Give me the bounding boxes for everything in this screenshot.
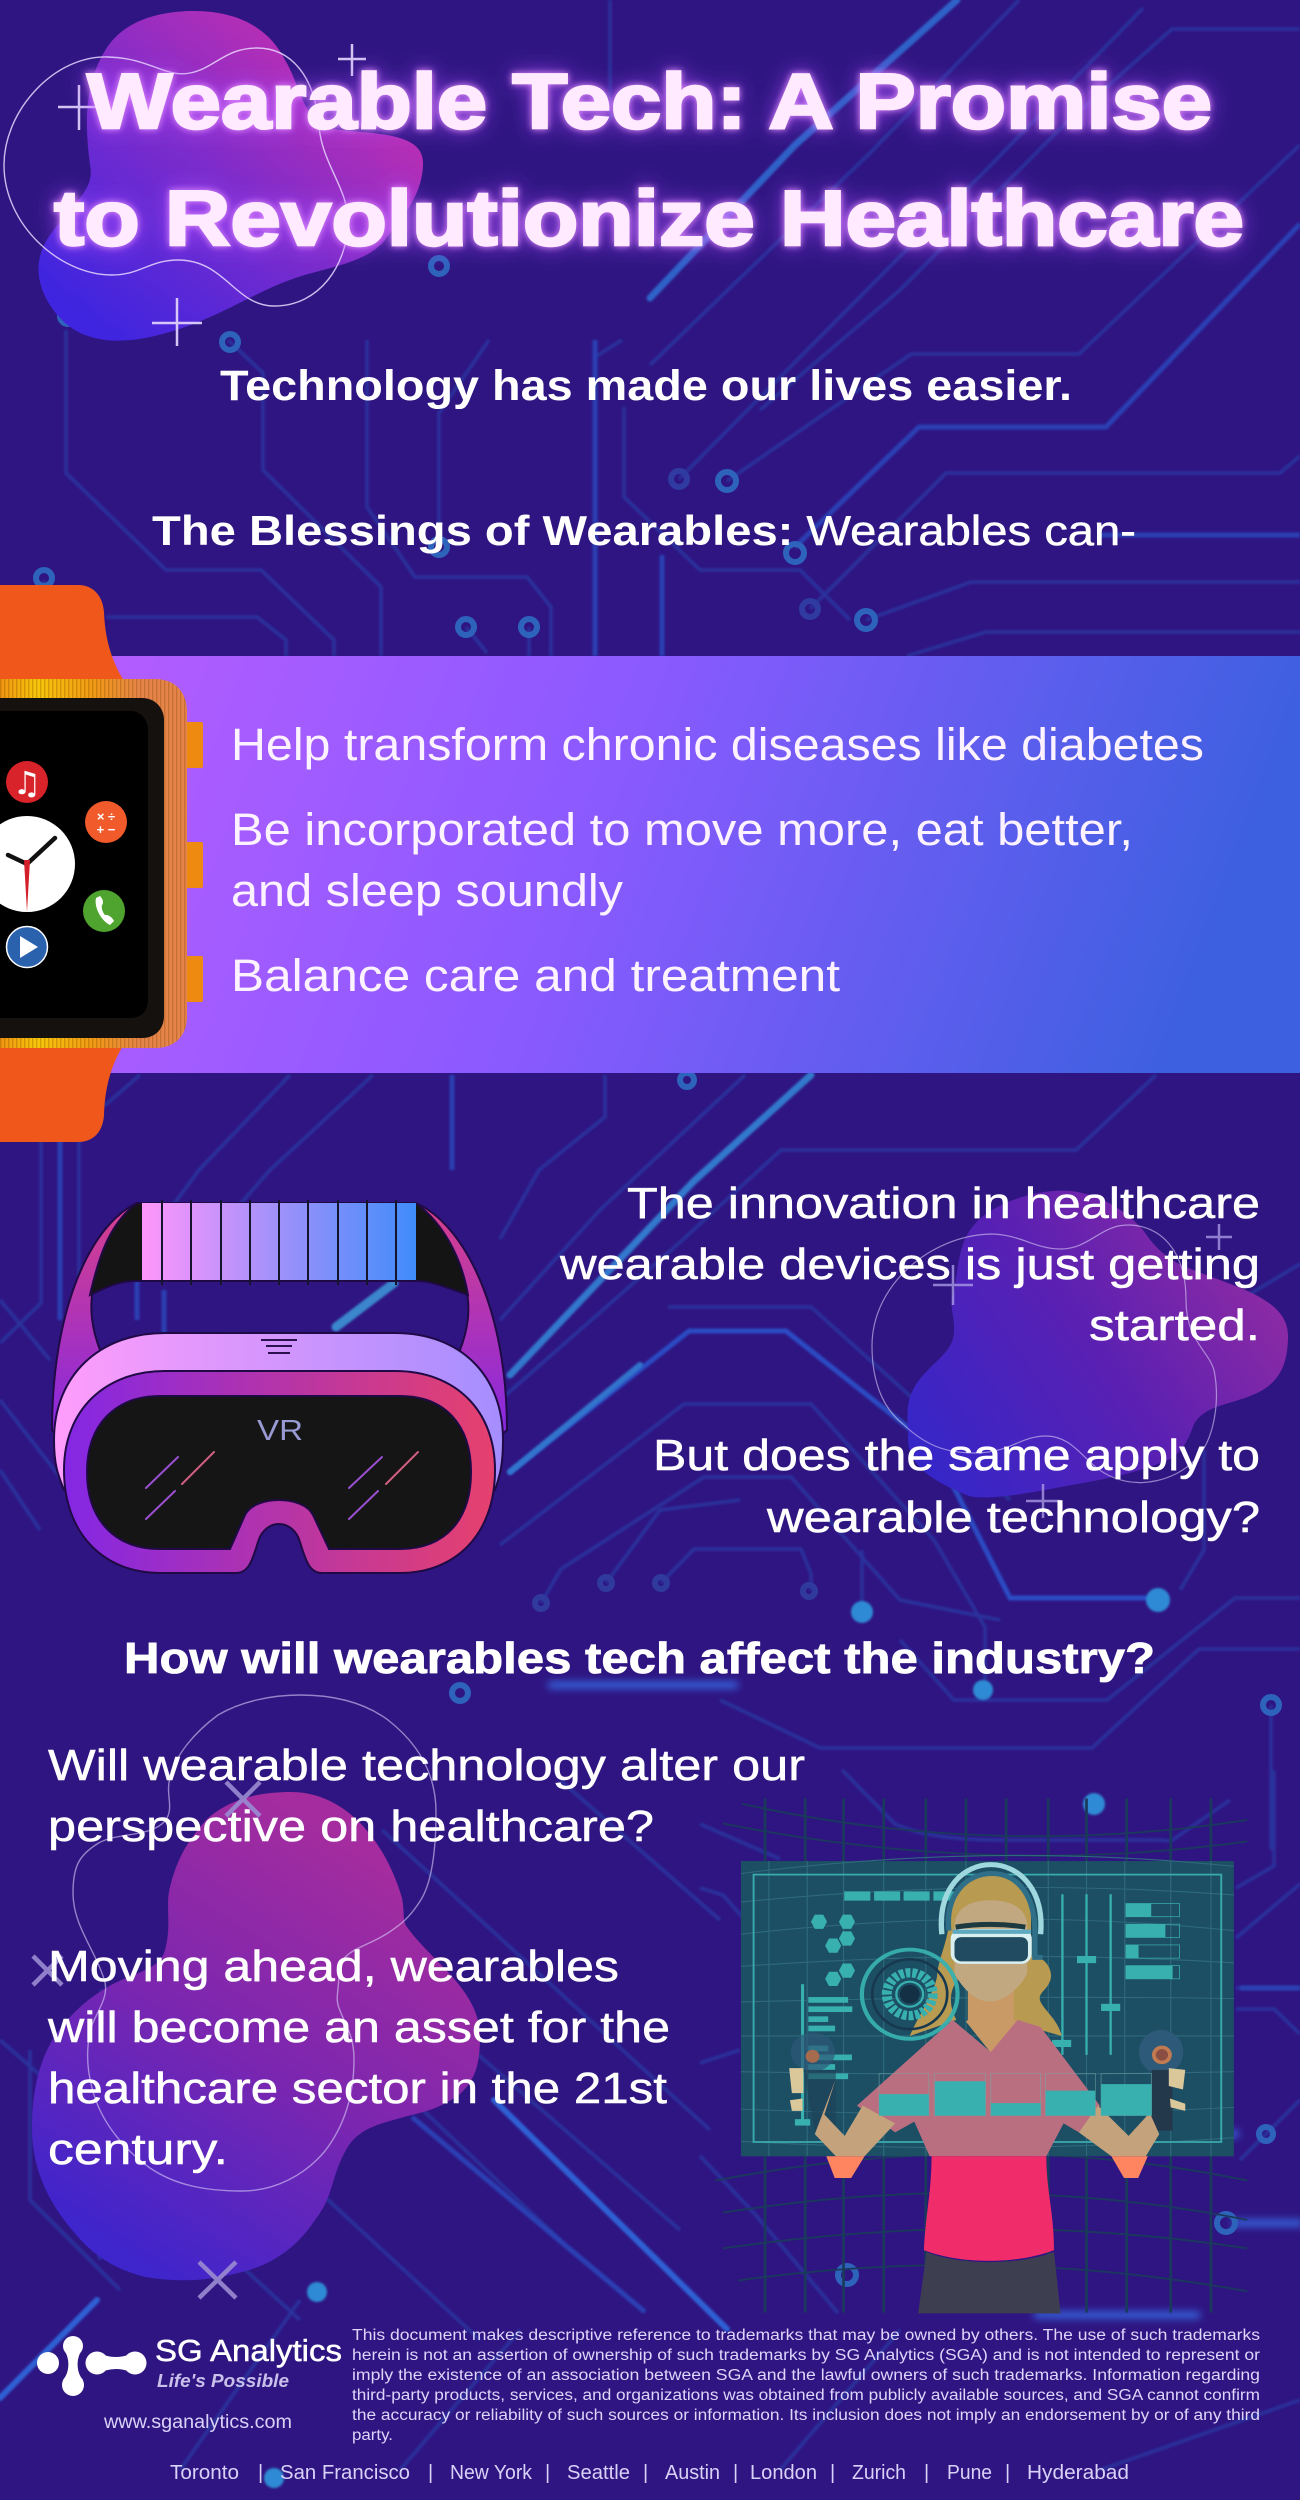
- clock face: [0, 816, 75, 912]
- app icon: phone: [83, 890, 125, 932]
- VR logo: VR: [257, 1415, 303, 1447]
- office locations: New York: [450, 2462, 533, 2484]
- left data lines: [795, 1984, 852, 2126]
- office locations: London: [750, 2462, 817, 2484]
- visor lens: [87, 1396, 471, 1549]
- text block: innovation: wearable devices is just getting: [559, 1240, 1260, 1289]
- office locations: Pune: [947, 2462, 992, 2484]
- text block: innovation: The innovation in healthcare: [627, 1179, 1260, 1228]
- disclaimer: This document makes descriptive reference to trademarks that may be owned by others. The use of such trademarks: [352, 2327, 1260, 2344]
- list item 2: and sleep soundly: [231, 865, 624, 916]
- text block: same apply question: wearable technology?: [766, 1493, 1260, 1542]
- watch screen: [0, 698, 164, 1038]
- logo tagline: Life's Possible: [157, 2371, 289, 2391]
- bottom bar chart: [879, 2073, 1152, 2116]
- office locations: |: [258, 2462, 263, 2484]
- skirt: [918, 2252, 1061, 2313]
- text block: innovation: started.: [1089, 1301, 1260, 1350]
- office locations: [170, 2462, 1129, 2484]
- decorative blob: right: [872, 1191, 1288, 1518]
- disclaimer: party.: [352, 2427, 393, 2444]
- list item 1: Help transform chronic diseases like diabetes: [231, 719, 1204, 770]
- lens reflections: [146, 1452, 418, 1519]
- section heading: blessings of wearables: The Blessings of Wearables: Wearables can-: [152, 507, 1136, 554]
- office locations: |: [733, 2462, 738, 2484]
- right sliders: [1052, 1894, 1120, 2055]
- website url: www.sganalytics.com: [103, 2412, 292, 2433]
- office locations: |: [830, 2462, 835, 2484]
- watch side buttons: [186, 722, 203, 1002]
- text block: perspective question: Will wearable technology alter our: [48, 1741, 805, 1790]
- office locations: |: [428, 2462, 433, 2484]
- panel grid: [741, 1855, 1234, 2156]
- shirt in panel: [857, 2020, 1100, 2156]
- top bars: [844, 1891, 989, 1901]
- app icon: calculator: × ÷: [97, 809, 115, 824]
- gauge: [862, 1950, 958, 2039]
- app icon: music: ♫: [13, 764, 41, 802]
- icon: VR headset: [52, 1200, 507, 1573]
- list item 3: Balance care and treatment: [231, 950, 841, 1001]
- right arm: [1079, 2106, 1159, 2156]
- title: to Revolutionize Healthcare: [54, 174, 1244, 262]
- disclaimer: the accuracy or reliability of such sources or information. Its inclusion does not imply an endorsement by or of any third: [352, 2407, 1260, 2424]
- app icon: music: [6, 761, 48, 803]
- app icon: play: [6, 926, 48, 968]
- face: [954, 1900, 1027, 2001]
- title: Wearable Tech: A Promise: [87, 57, 1212, 145]
- list item 2: [231, 804, 1133, 916]
- headset band: [941, 1865, 1041, 1934]
- disclaimer: [352, 2327, 1260, 2444]
- text block: asset statement: Moving ahead, wearables: [48, 1942, 619, 1991]
- panel frame: [754, 1875, 1221, 2142]
- hexagons: [811, 1915, 855, 1986]
- text block: same apply question: But does the same apply to: [653, 1431, 1260, 1480]
- app icon: calculator: + −: [97, 822, 116, 837]
- office locations: Hyderabad: [1027, 2462, 1129, 2484]
- logo mark: [37, 2336, 146, 2396]
- list item 2: Be incorporated to move more, eat better,: [231, 804, 1133, 855]
- subheading: Technology has made our lives easier.: [220, 362, 1072, 410]
- visor shell: [54, 1333, 503, 1500]
- office locations: |: [643, 2462, 648, 2484]
- watch strap: [0, 585, 130, 1142]
- person: [815, 1865, 1159, 2313]
- text block: asset statement: will become an asset for the: [47, 2003, 670, 2052]
- office locations: |: [1005, 2462, 1010, 2484]
- panel: blessings list: [0, 656, 1300, 1073]
- right bars: [1126, 1904, 1180, 1979]
- office locations: San Francisco: [280, 2462, 410, 2484]
- text block: innovation: [559, 1179, 1260, 1350]
- visor rim: [64, 1371, 495, 1573]
- head band: [90, 1203, 468, 1295]
- office locations: |: [924, 2462, 929, 2484]
- shirt: [924, 2156, 1054, 2261]
- text block: asset statement: healthcare sector in the 21st: [48, 2064, 667, 2113]
- controllers and hands: [789, 2030, 1185, 2131]
- text block: same apply question: [653, 1431, 1260, 1542]
- text block: asset statement: [47, 1942, 670, 2174]
- disclaimer: third-party products, services, and organizations was obtained from publicly available sources, and SGA cannot confirm: [352, 2387, 1260, 2404]
- logo wordmark: SG Analytics: [155, 2333, 342, 2368]
- mid traces: [60, 224, 1300, 2312]
- footer logo: [37, 2333, 342, 2396]
- headset strap: [52, 1203, 137, 1440]
- decorative blob: top left: [4, 11, 423, 346]
- hair: [910, 1875, 1062, 2036]
- disclaimer: imply the existence of an association between SGA and the lawful owners of such trademarks. Information regarding: [352, 2367, 1260, 2384]
- illustration: woman using VR interface: [715, 1799, 1247, 2313]
- office locations: Austin: [665, 2462, 720, 2484]
- office locations: Toronto: [170, 2462, 239, 2484]
- office locations: Seattle: [567, 2462, 630, 2484]
- decorative blob: lower left: [32, 1695, 480, 2298]
- office locations: |: [545, 2462, 550, 2484]
- text block: perspective question: perspective on healthcare?: [48, 1802, 654, 1851]
- app icon: calculator: [85, 801, 127, 843]
- circuit nodes: [36, 258, 1279, 2284]
- grid behind: [715, 1799, 1247, 2313]
- neck: [966, 1991, 1018, 2053]
- left arm: [815, 2079, 895, 2156]
- watch casing: [0, 679, 187, 1048]
- icon: smartwatch: [0, 585, 203, 1142]
- holographic panel: [741, 1861, 1234, 2156]
- gradient band segments: [142, 1200, 416, 1285]
- office locations: Zurich: [852, 2462, 906, 2484]
- title: [54, 57, 1244, 262]
- disclaimer: herein is not an assertion of ownership of such trademarks by SG Analytics (SGA) and is not intended to represent or: [352, 2347, 1260, 2364]
- text block: perspective question: [48, 1741, 805, 1851]
- goggles: [951, 1929, 1032, 1964]
- text block: asset statement: century.: [48, 2125, 228, 2174]
- vent lines: [261, 1340, 297, 1353]
- section heading: industry: How will wearables tech affect the industry?: [124, 1634, 1155, 1683]
